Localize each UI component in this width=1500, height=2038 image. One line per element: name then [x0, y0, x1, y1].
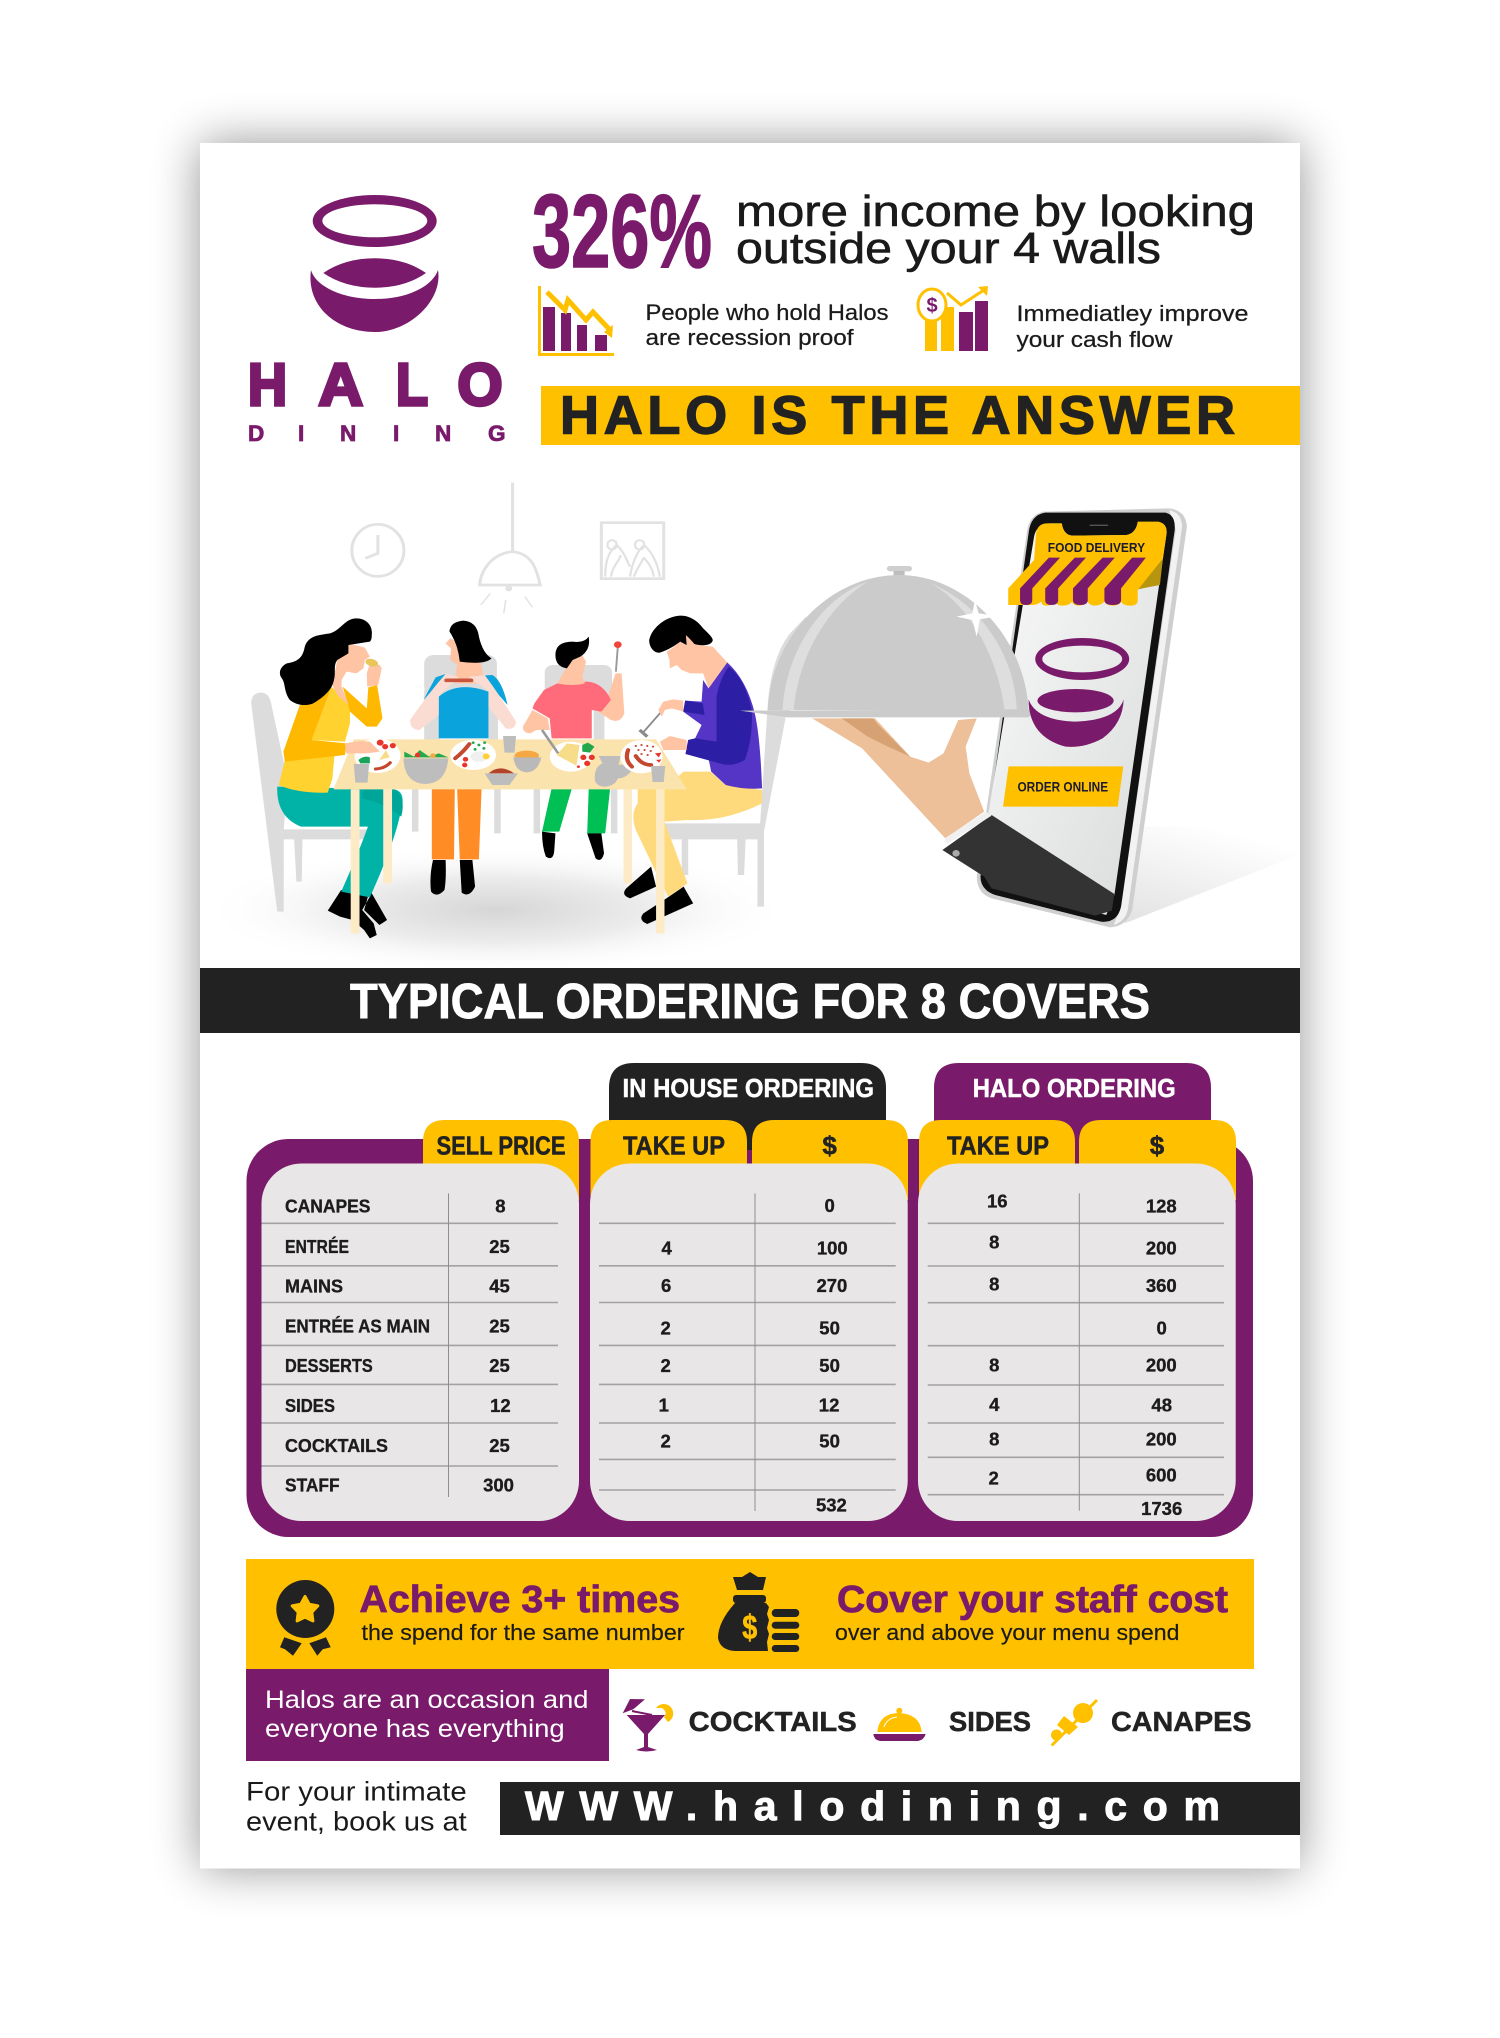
menu item labels [285, 1196, 430, 1496]
halo dollar values: 200 [1146, 1238, 1177, 1259]
in house dollar values: 12 [819, 1395, 839, 1416]
in house take up values: 4 [661, 1238, 672, 1259]
illustration: phone and serving hand [740, 508, 1299, 927]
stat: 326%: 326% [532, 174, 712, 290]
logo word HALO [248, 352, 502, 418]
headline text [736, 187, 1255, 273]
tab: in house take up: TAKE UP [623, 1130, 725, 1160]
menu item labels: DESSERTS [285, 1355, 373, 1376]
text: book us: event, book us at [246, 1807, 467, 1837]
sell price values: 12 [490, 1395, 511, 1416]
tab: in house dollars: $ [822, 1130, 837, 1160]
text: cover your staff cost: Cover your staff cost [837, 1579, 1228, 1621]
menu item labels: SIDES [285, 1395, 335, 1416]
text: recession proof: People who hold Halos [646, 300, 888, 325]
halo dollar values: 360 [1146, 1275, 1177, 1296]
sell price values [483, 1196, 514, 1496]
tab: halo take up [919, 1120, 1075, 1200]
halo take up values [987, 1190, 1008, 1488]
menu item labels: CANAPES [285, 1196, 370, 1217]
sell price values: 25 [489, 1435, 510, 1456]
logo ring [313, 195, 437, 247]
poster drop shadow [200, 143, 1300, 1868]
order online button [1003, 766, 1123, 807]
tab: in house take up [590, 1120, 747, 1200]
headline text: outside your 4 walls [736, 224, 1161, 273]
table [333, 739, 687, 933]
in house take up values: 1 [659, 1395, 669, 1416]
sell price values: 8 [495, 1196, 506, 1217]
serving hand [812, 718, 992, 857]
halo dollar values: 128 [1146, 1195, 1177, 1216]
band: typical ordering title: TYPICAL ORDERING FOR 8 COVERS [350, 975, 1150, 1029]
text: cash flow [1016, 301, 1248, 352]
panel: halo ordering [918, 1164, 1236, 1521]
illustration: family dining at table [198, 483, 806, 975]
text: book us: For your intimate [246, 1777, 467, 1807]
sell price values: 25 [489, 1236, 510, 1257]
phone ground shadow [1125, 827, 1299, 923]
callout: Halos are an occasion: Halos are an occasion and [265, 1686, 588, 1714]
diner: girl in blue [410, 621, 516, 895]
panel: menu and sell price [262, 1164, 579, 1521]
menu item labels: ENTRÉE AS MAIN [285, 1315, 430, 1336]
table purple frame [246, 1139, 1253, 1537]
tab: halo dollars [1079, 1120, 1236, 1200]
in house dollar values: 50 [819, 1355, 840, 1376]
band: typical ordering title [200, 968, 1300, 1033]
food and dishes [354, 730, 665, 787]
in house take up values: 2 [661, 1431, 671, 1452]
tab: sell price [423, 1120, 579, 1200]
in house take up values: 2 [661, 1317, 671, 1338]
sleeve behind [942, 815, 1114, 916]
order online button: ORDER ONLINE [1017, 780, 1108, 795]
tab: in house ordering: IN HOUSE ORDERING [622, 1073, 874, 1103]
halo take up values: 2 [989, 1467, 999, 1488]
tab: in house ordering [609, 1063, 886, 1150]
icon: falling chart [540, 286, 614, 354]
in house dollar values: 50 [819, 1317, 840, 1338]
logo word HALO: H [248, 352, 287, 418]
in house dollar values: 50 [819, 1431, 840, 1452]
diner: woman in yellow [277, 618, 403, 938]
text: cover your staff cost [835, 1579, 1228, 1645]
diner: boy in pink [523, 637, 624, 860]
banner: yellow benefits strip [246, 1559, 1254, 1669]
menu item labels: COCKTAILS [285, 1435, 388, 1456]
halo dollar values: 600 [1146, 1465, 1177, 1486]
menu item labels: STAFF [285, 1475, 340, 1496]
logo word HALO: O [458, 352, 502, 418]
floor shadow [198, 845, 795, 975]
logo word HALO: A [318, 352, 363, 418]
logo word HALO: L [396, 352, 428, 418]
halo dollar values: 200 [1146, 1428, 1177, 1449]
in house dollar values: 532 [816, 1494, 847, 1516]
chairs [251, 617, 806, 912]
icon: money bag and coins [718, 1572, 799, 1652]
text: achieve 3+ times: the spend for the same number [362, 1620, 684, 1645]
callout: Halos are an occasion: everyone has everything [265, 1715, 565, 1743]
sell price values: 45 [489, 1276, 510, 1297]
in house dollar values: 0 [824, 1195, 835, 1216]
text: achieve 3+ times [359, 1579, 684, 1645]
halo take up values: 8 [989, 1274, 999, 1295]
halo take up values: 8 [989, 1231, 999, 1252]
banner: Halo is the answer: HALO IS THE ANSWER [560, 386, 1235, 446]
logo word DINING: DINING [248, 421, 506, 446]
ordering table [246, 1063, 1253, 1537]
halo take up values: 8 [989, 1428, 999, 1449]
label: sides: SIDES [949, 1706, 1031, 1737]
diner: man in purple [624, 616, 762, 924]
sell price values: 300 [483, 1475, 514, 1496]
logo: Halo Dining [248, 195, 506, 446]
in house take up values: 2 [661, 1355, 671, 1376]
icon: serving cloche [873, 1708, 926, 1741]
tab: halo ordering [934, 1063, 1211, 1150]
halo take up values: 16 [987, 1190, 1008, 1211]
menu item labels: ENTRÉE [285, 1236, 349, 1257]
text: recession proof: are recession proof [646, 325, 854, 350]
in house dollar values: 100 [817, 1238, 848, 1259]
icon: medal [276, 1580, 334, 1656]
in house take up values [659, 1238, 672, 1452]
sell price values: 25 [489, 1315, 510, 1336]
headline text: more income by looking [736, 187, 1255, 236]
tab: halo dollars: $ [1150, 1130, 1165, 1160]
in house dollar values: 270 [816, 1275, 847, 1296]
halo dollar values: 200 [1146, 1355, 1177, 1376]
icon: money bag and coins: $ [742, 1609, 757, 1647]
halo dollar values: 0 [1157, 1318, 1167, 1339]
cloche tray [740, 709, 1036, 717]
callout: Halos are an occasion [246, 1669, 609, 1761]
halo dollar values: 1736 [1141, 1498, 1182, 1519]
text: cash flow: Immediatley improve [1016, 301, 1248, 326]
halo take up values: 4 [989, 1394, 1000, 1415]
band: website url: WWW.halodining.com [525, 1783, 1220, 1829]
hands and cutlery [345, 699, 687, 753]
tab: halo take up: TAKE UP [947, 1130, 1049, 1160]
awning [1008, 521, 1167, 606]
in house dollar values [816, 1195, 848, 1516]
panel: in house ordering [590, 1164, 908, 1521]
text: cover your staff cost: over and above your menu spend [835, 1620, 1180, 1645]
label: canapes: CANAPES [1111, 1706, 1252, 1737]
poster sheet [200, 143, 1300, 1868]
menu item labels: MAINS [285, 1276, 343, 1297]
in house take up values: 6 [661, 1275, 671, 1296]
text: cash flow: your cash flow [1016, 327, 1173, 352]
text: achieve 3+ times: Achieve 3+ times [359, 1579, 680, 1621]
icon: skewer [1051, 1700, 1097, 1746]
tab: sell price: SELL PRICE [436, 1130, 566, 1160]
awning: FOOD DELIVERY [1048, 540, 1146, 555]
phone screen logo [1029, 638, 1129, 747]
tab: in house dollars [752, 1120, 908, 1200]
logo bowl [310, 258, 439, 332]
icon: rising chart with coin: $ [926, 295, 938, 317]
wall decor: clock, lamp, picture [352, 483, 664, 613]
label: cocktails: COCKTAILS [689, 1706, 857, 1737]
halo dollar values: 48 [1151, 1395, 1172, 1416]
text: book us [246, 1777, 467, 1837]
icon: rising chart with coin [918, 286, 988, 351]
text: recession proof [646, 300, 888, 350]
icon: cocktail [623, 1699, 673, 1752]
halo dollar values [1141, 1195, 1182, 1519]
phone body [977, 508, 1187, 927]
cloche dome [768, 566, 1029, 710]
halo take up values: 8 [989, 1355, 999, 1376]
tab: halo ordering: HALO ORDERING [973, 1073, 1176, 1103]
sell price values: 25 [489, 1355, 510, 1376]
